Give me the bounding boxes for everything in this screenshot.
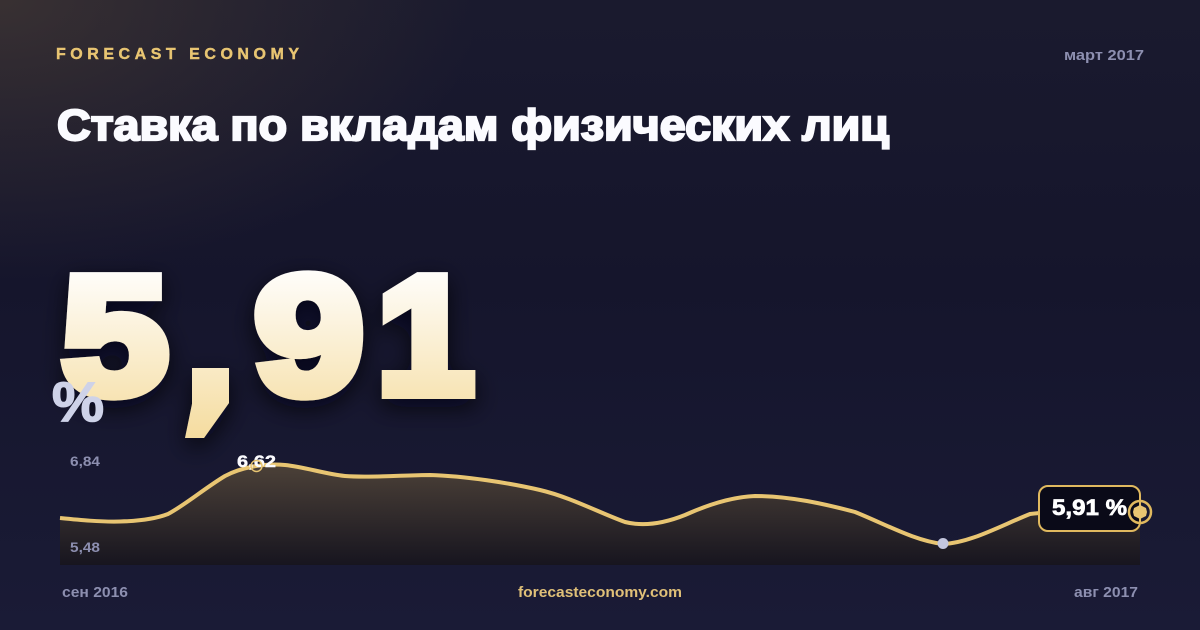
brand label: FORECAST ECONOMY: [56, 46, 299, 63]
big value: 9: [254, 243, 364, 429]
peak marker: [251, 460, 262, 472]
start date: сен 2016: [62, 584, 128, 601]
chart area: [60, 465, 1140, 565]
big value: [62, 243, 474, 438]
axis max label: 6,84: [70, 453, 100, 469]
current value callout: [1039, 486, 1140, 531]
chart: [60, 452, 1151, 565]
title: Ставка по вкладам физических лиц: [57, 101, 889, 150]
percent sign: %: [52, 370, 104, 433]
peak label: 6,62: [237, 452, 276, 471]
low marker: [938, 538, 948, 549]
current marker: [1129, 501, 1151, 523]
site url: forecasteconomy.com: [518, 584, 682, 601]
date: март 2017: [1064, 47, 1144, 64]
end date: авг 2017: [1074, 584, 1138, 601]
axis min label: 5,48: [70, 539, 100, 555]
current value callout: 5,91 %: [1052, 495, 1127, 520]
big value: 5: [62, 243, 168, 429]
chart line: [60, 465, 1140, 544]
big value: 1: [377, 243, 474, 429]
